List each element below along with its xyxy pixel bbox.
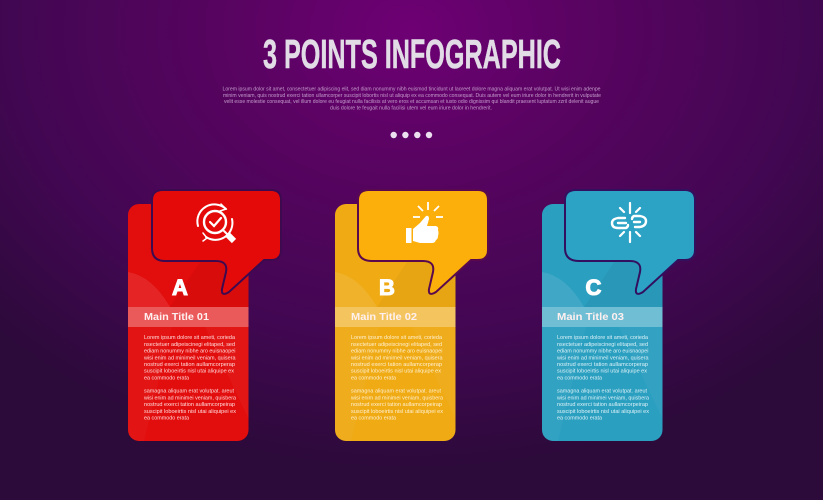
heading B: Main Title 02 (351, 311, 417, 323)
text A: suscipit loboeirtis nisl utai aliquipei ex (144, 409, 236, 415)
intro paragraph: duis dolore te feugait nulla facilisi utem vel eum iriure dolor in hendrerit. (330, 105, 492, 111)
text B: Lorem ipsum dolore sit ameti, corieda (351, 335, 443, 341)
icon: search target (197, 204, 234, 241)
text B: ediam nonummy nibhe aro euisnaopei (351, 349, 442, 355)
speech bubble C (565, 190, 695, 294)
text C: wisi enim ad minimeil veniam, quisera (556, 355, 649, 361)
panel: C (542, 190, 695, 441)
text B: ea commodo erata (351, 416, 397, 422)
text A: ea commodo erata (144, 416, 190, 422)
text A: wisi enim ad minimei veniam, quisbera (143, 395, 237, 401)
text B: nostrud exerci tation aullamcorpeirap (351, 402, 442, 408)
intro paragraph (222, 86, 601, 111)
text B (350, 335, 444, 422)
text C: samagna aliquam erat volutpat. areut (557, 389, 647, 395)
text C: ediam nonummy nibhe aro euisnaopei (557, 349, 648, 355)
text C: ea commodo erata (557, 375, 603, 381)
intro paragraph: Lorem ipsum dolor sit amet, consectetuer adipiscing elit, sed diam nonummy nibh euismod tincidunt ut laoreet dolore magna aliquam erat volutpat. Ut wisi enim adenpe (222, 86, 601, 92)
text C: ea commodo erata (557, 416, 603, 422)
text C: nostrud exerci tation aullamcorpeirap (557, 402, 648, 408)
text B: wisi enim ad minimeil veniam, quisera (350, 355, 443, 361)
text C: nostrud exerci tation aullamcorperap (557, 362, 648, 368)
speech bubble A (152, 190, 281, 294)
text C: suscipit loboeirtis nisl utai aliquipe ex (557, 369, 647, 375)
text A: nostrud exerci tation aullamcorperap (144, 362, 235, 368)
panel: A (128, 190, 281, 441)
text C: suscipit loboeirtis nisl utai aliquipei ex (557, 409, 649, 415)
pagination dots (390, 132, 432, 138)
text B: samagna aliquam erat volutpat. areut (351, 389, 441, 395)
text A (143, 335, 237, 422)
panel: B (335, 190, 488, 441)
text B: wisi enim ad minimei veniam, quisbera (350, 395, 444, 401)
text C: Lorem ipsum dolore sit ameti, corieda (557, 335, 649, 341)
text B: suscipit loboeirtis nisl utai aliquipei ex (351, 409, 443, 415)
letter C: C (586, 275, 602, 300)
text C: nsectetuer adipeiscinegi elitaped, sed (557, 342, 648, 348)
icon: broken chain (612, 203, 646, 242)
heading A: Main Title 01 (144, 311, 209, 323)
text A: ea commodo erata (144, 375, 190, 381)
intro paragraph: minim veniam, quis nostrud exerci tation ullamcorper suscipit lobortis nisl ut aliquip ex ea commodo consequat. Duis autem vel eum iriure dolor in hendrerit in vulputate (223, 93, 601, 99)
card body B (335, 204, 456, 441)
banner A (128, 307, 248, 327)
heading C: Main Title 03 (557, 311, 624, 323)
text B: suscipit loboeirtis nisl utai aliquipe ex (351, 369, 441, 375)
text A: suscipit loboeirtis nisl utai aliquipe ex (144, 369, 234, 375)
text A: wisi enim ad minimeil veniam, quisera (143, 355, 236, 361)
text C: wisi enim ad minimei veniam, quisbera (556, 395, 650, 401)
banner B (335, 307, 456, 327)
text A: Lorem ipsum dolore sit ameti, corieda (144, 335, 236, 341)
intro paragraph: velit esse molestie consequat, vel illum dolore eu feugiat nulla facilisis at vero eros et accumsan et iusto odio dignissim qui blandit praesent luptatum zzril delenit augue (224, 99, 599, 105)
card body A (128, 204, 249, 441)
card body C (542, 204, 663, 441)
letter A: A (172, 275, 188, 300)
text B: nostrud exerci tation aullamcorperap (351, 362, 442, 368)
banner C (542, 307, 662, 327)
text C (556, 335, 650, 422)
title: 3 POINTS INFOGRAPHIC (263, 31, 561, 77)
text A: ediam nonummy nibhe aro euisnaopei (144, 349, 236, 355)
text B: ea commodo erata (351, 375, 397, 381)
text A: nostrud exerci tation aullamcorpeirap (144, 402, 235, 408)
text A: samagna aliquam erat volutpat. areut (144, 389, 234, 395)
icon: thumbs up (406, 202, 443, 243)
text A: nsectetuer adipeiscinegi elitaped, sed (144, 342, 235, 348)
speech bubble B (358, 190, 488, 294)
letter B: B (379, 275, 395, 300)
text B: nsectetuer adipeiscinegi elitaped, sed (351, 342, 442, 348)
